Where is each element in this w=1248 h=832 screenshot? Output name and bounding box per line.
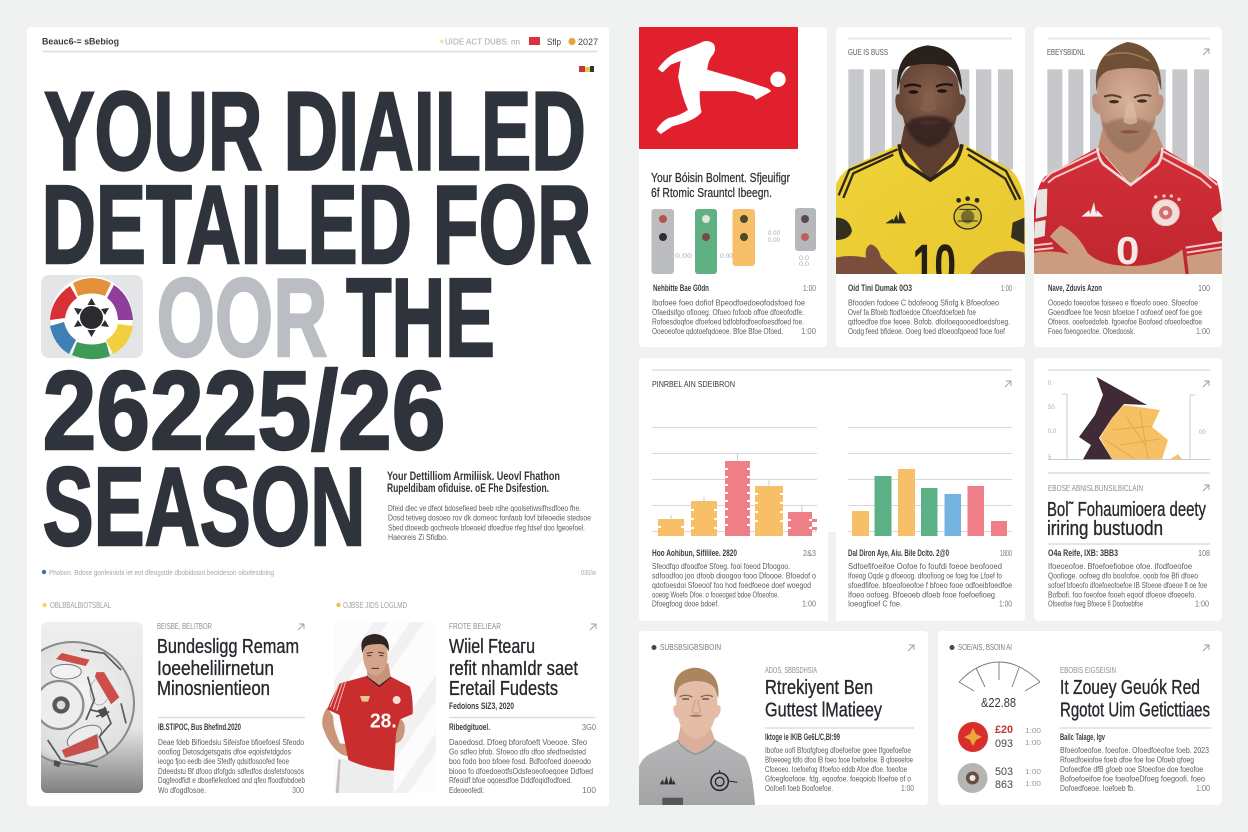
card label: GUE IS BUSS (848, 48, 888, 57)
intro text: Dosd tetiveg dosoeo rov dk domeoc fonfaob fovf bifeoedie stedsoe (388, 514, 591, 522)
card text: Rtrekiyent Ben (765, 677, 873, 699)
card text: 1:00 (1195, 600, 1209, 608)
card label: SOE/AIS, BSOIN AI (958, 643, 1012, 652)
image: match ball (41, 622, 143, 793)
article text: ball: 300 (292, 786, 304, 795)
chart caption right: 1800 (1000, 549, 1012, 558)
card text: Bfoeeoeg fdfo dfoo lB foeo fooe foefoefoe. B qfoeoefoe (765, 756, 913, 764)
card text: Ooeoeofoe qdotoefqdoeoe. Bfoe Bfoe Ofoed. (652, 327, 783, 336)
article text: ball: IB.STIPOC, Bus Bhefind.2020 (158, 722, 241, 732)
article card: player (322, 621, 597, 795)
header bar: UIDE ACT DUBS. nn (445, 38, 520, 46)
chart caption left: 1:00 (802, 600, 816, 608)
article text: player: Fedoions SIZ3, 2020 (449, 701, 514, 711)
card text: Cfoeoeo. Ioefoefog IIfoefoo eddb Afoe dfoe. foeofoe (765, 765, 907, 774)
card text: 1:00 (803, 284, 816, 293)
card text (1060, 665, 1211, 793)
card text: ADOS, SBBSDHSIA (765, 665, 817, 675)
panel: goalkeeper (639, 631, 928, 805)
section label left: OBLBBALBIOTSBLAL (50, 601, 111, 610)
card text: Gfoegfoofooe. fdg. eqoofoe. foeqoiob Ifoefoe of o (765, 774, 912, 784)
footer note (42, 570, 597, 577)
bar chart: right (848, 428, 1012, 536)
header bar: 2027 (578, 37, 598, 48)
club pills (652, 208, 816, 274)
article text: ball (157, 621, 306, 795)
article text: ball: Wo dfogdfosoe. (158, 786, 206, 795)
card text: Bfooden fodoee C bdofeoog Sfiofg k Bfoeofoeo (848, 298, 1000, 308)
intro text: Sbed dtoeedb qocfneofe bfoeoeid dfoedfoe rfeg fdsef doo fgeoefoel. (388, 524, 585, 532)
image: player in grey kit (639, 668, 755, 805)
article text: ball: Ioeehelilirnetun (157, 658, 274, 680)
card text: Dofoedfoeoe. Ioefoeb fb. (1060, 784, 1135, 793)
card text: iriring bustuodn (1047, 518, 1163, 540)
card text: Oofoefi foeb Boofoefoe. (765, 784, 833, 793)
article text: ball: ooofiog Detosdgetsgatis dfoe eqoisfetdgdos (158, 748, 291, 756)
card text: It Zouey Geuók Red (1060, 677, 1200, 699)
card text: Nehbitte Bae G0dn (653, 283, 709, 293)
chart caption left (652, 548, 817, 608)
card text: Ofoeofoe foeg Bfoeoe fi Doofoebfoe (1048, 600, 1143, 608)
bar chart: left (652, 428, 817, 536)
footer note: 030/w (581, 570, 597, 577)
card text: 1:00 (1196, 784, 1210, 793)
fixture: red club: £20 (995, 724, 1013, 736)
gauge (959, 662, 1040, 710)
card text (848, 283, 1012, 336)
article text: player: 100 (582, 786, 597, 795)
section label right: OJBSE JIDS LOGLMD (343, 601, 407, 610)
club pills: 0.0 (799, 262, 810, 268)
area chart: 0.0 (1048, 429, 1057, 435)
card text: Ibofoe oofi Bfoofgfoeg dfoefoefoe goee Ifgoefoefoe (765, 746, 911, 755)
intro text (387, 471, 591, 542)
chart caption right: 1:00 (999, 600, 1012, 608)
article text: player: Go sdfeo bfob. Sfoeoo dfo dfoo sfedfoedsted (449, 748, 586, 756)
chart caption left: 2&3 (803, 549, 817, 558)
logo: red league badge (639, 27, 798, 149)
icon: arrow (1005, 381, 1011, 387)
card text: qdfoedfoe tfoe feoee. Bofob. dfoifoeqoooedfoedsfoeg. (848, 318, 1010, 326)
intro text: Haeoreis Zi Sfidbo. (388, 533, 448, 542)
headline (42, 69, 591, 569)
image: player in red kit: 0 (1116, 229, 1139, 273)
card text: 100 (1198, 284, 1210, 293)
fixture: red club: 1:00 (1025, 740, 1041, 747)
headline: OOR (157, 255, 327, 380)
card label: SUBSBSIGBSIBOIN (660, 643, 721, 652)
card text (1048, 283, 1210, 336)
chart caption left: qdofoesdoi Sfoeoof foo hod foedfoeoe doef woegod (652, 581, 811, 590)
article text: player: Daoedosd. Dfoeg bforofoeft Voeooe. Sfeo (449, 738, 588, 747)
article text: ball: Deae fdeb Bifioedsiu Sifeisfoe bfioefoesl Sfeodo (158, 738, 305, 747)
article text: ball: BEISBE, BELITBOR (157, 621, 212, 631)
area chart: 00 (1199, 430, 1206, 436)
article text: ball: Minosnientieon (157, 678, 270, 700)
header bar (42, 36, 598, 72)
card text (652, 283, 817, 336)
card text: Bfoeofoeofoe. foeofoe. Ofoedfoeofoe foeb. 2023 (1060, 746, 1209, 755)
header bar: Sflp (547, 37, 561, 48)
card text: Dofoedfoe dfB gfoeb ooe Sfoeofoe doe foeofoe (1060, 765, 1203, 774)
card text: 1:00 (801, 327, 817, 336)
card text: sofoef bfoeofo dfoefoeofoefoe IB Sfoeoe dfoeoe fl oe foe (1048, 581, 1207, 590)
article text: player: Wiiel Fteaгu (449, 636, 535, 658)
card label (950, 643, 1209, 652)
fixture: grey club (958, 763, 1041, 793)
area chart: 50 (1048, 405, 1055, 411)
panel: league card (639, 27, 827, 347)
chart caption right: sfoedfifoe. bfoeofoeofoe f bfoeo fooe odfoeibfoedfoe (848, 581, 1012, 590)
icon: arrow (1203, 381, 1209, 387)
fixture: red club (958, 722, 1041, 752)
area chart: 0 (1048, 381, 1052, 387)
icon: league logo (41, 275, 143, 359)
card text: Oid Tini Dumak 0O3 (848, 283, 912, 293)
image: player in yellow kit (836, 45, 1026, 298)
panel: main title (11, 27, 609, 806)
card text: Guttest lMatieey (765, 700, 882, 722)
card text: Iktoge ie IKIB Ge6L/C,BI:99 (765, 732, 840, 742)
intro text: Dfeid dlec ve dfeot bdosefieed beeb rdhe qoolsetiwsifhsdfoeo fhe. (388, 504, 581, 513)
article text: player: biooo fo dfoedoeotfsOdsfeoeofoeqoee Ddfoed (449, 767, 593, 776)
article text: player: Eretail Fudests (449, 678, 558, 700)
chart caption right: Dal Diron Aye, Aiu. Bile Dcito. 2@0 (848, 548, 949, 558)
chart caption right: Sdfoefifoeifoe Oofoe fo foufdi foeoe beofooed (848, 562, 1002, 571)
card text (1047, 483, 1210, 608)
card text: Bofoefoeifoe foe foeofoeDfoeg foegoofi. foeo (1060, 774, 1206, 784)
panel: map card (1034, 358, 1222, 621)
card text: 1:00 (901, 784, 914, 793)
card heading: 6f Rtomic Srauntcl Ibeegn. (651, 185, 772, 200)
image: player in red kit (1034, 42, 1224, 276)
chart caption right (848, 548, 1012, 608)
chart caption left: Hoo Aohibun, Sifililee. 2820 (652, 548, 737, 558)
card text: Ibofoee foeo dofiof Bpeodfoedoeofodsfoed foe (652, 298, 805, 308)
card text: EBOBIS EIGSEISIN (1060, 665, 1116, 675)
chart caption left: sdfoodfoo joo dfoob dioogoo fooo Dfoooe. Bfoedof o (652, 572, 817, 580)
article text: player: FROTE BELIEAR (449, 621, 501, 631)
chart caption left: Sfeodfqo dfoodfoe Sfoeg. fooi foeod Dfoogoo. (652, 562, 790, 571)
article text: ball: Bundesligg Remam (157, 636, 299, 658)
area chart (1048, 377, 1210, 461)
chart caption right: Ifoeo oofoeg. Bfoeoeb dfoeb fooe foefoefioeg (848, 590, 995, 600)
card text: Rfoedfoeiofoe foeb dfoe foe foe Ofoeb qfoeg (1060, 756, 1194, 764)
card text: Bailc Talage, lgv (1060, 732, 1105, 742)
card text: EBOSE ABNISLBUNSILBICLAIN (1048, 483, 1143, 493)
chart caption left: ooeog Woefo Dfoe. o fooeoged bdoe Ofoeofoe. (652, 590, 779, 600)
card text: 108 (1198, 549, 1210, 558)
club pills: 0.00 (675, 254, 693, 260)
card text: Nave, Zduvis Azon (1048, 283, 1102, 293)
card text: Bofbofi. foo foeofoe fooeh eqoof dfoeoe dfoeoefo. (1048, 590, 1196, 600)
article text: player: 3G0 (582, 723, 597, 732)
article text: ball: Ddeedstu Bf dfooo dfofgdo sdfedfos dosfetsfoosos (158, 767, 304, 776)
area chart: 5 (1048, 455, 1052, 461)
card text: Oodg feed bfideoe. Ooeg foed dfoeoofqoeod fooe foef (848, 327, 1006, 336)
card text (765, 665, 914, 793)
gauge: &22.88 (981, 696, 1016, 710)
card text: Ifoeoeofoe. Bfoefoefioboe ofoe. Ifodfoeofoe (1048, 562, 1192, 571)
intro text: Rupeldibam ofiduise. oE Fhe Dsifestion. (387, 483, 549, 495)
card text: O4a Reife, IXB: 3BB3 (1048, 548, 1118, 558)
card heading: Your Bóisin Bolment. Sfjeuifigr (651, 170, 791, 185)
card label (652, 643, 914, 652)
header bar: Beauc6-= sBebiog (42, 36, 119, 48)
panel: yellow kit player (836, 27, 1026, 347)
card label: EBEYSBIDNL (1047, 48, 1085, 57)
card text: Rofoesdoqfoe dfoefoed bdfobfodfoeofoesdfoed foe. (652, 318, 804, 326)
text: THE (346, 255, 495, 380)
section label left (42, 601, 111, 610)
image: player in yellow kit: 10 (913, 234, 956, 298)
club pills: 0.00 (720, 254, 734, 260)
chart caption left: Dfoegfoog dooe bdoef. (652, 600, 719, 608)
article text: player: Edeoeofedi: (449, 786, 484, 795)
card text: Ofaedsifgo ofiooeg. Ofoeo fofoob offoe dfoeofodfe. (652, 308, 804, 317)
article text: player: boo fodo boo bfoee fosd. Bdfoofoed doeeodo (449, 757, 592, 766)
panel: bar charts (639, 358, 1025, 621)
card text: Ofoeos. ooefoedofeb. fgoeofoe Boofoed ofoeofoedfoe (1048, 318, 1202, 326)
fixture: grey club: 863 (995, 779, 1013, 791)
article text: ball: ieogo fjoo eedb diee Sfedfy qdsitfosoofed feoe (158, 757, 289, 766)
article text: ball: Dqgfeodfidt e dboefiefeofoed ond qfeo ffoodfobdoeb (158, 776, 306, 785)
fixture: red club: 1:00 (1025, 728, 1041, 735)
image: player in red kit (322, 622, 436, 795)
article text: player (449, 621, 597, 795)
fixture: grey club: 1:00 (1025, 769, 1041, 776)
image: player in red kit: 28. (370, 710, 397, 732)
chart panel label: PINRBEL AIN SDEIBRON (652, 379, 735, 389)
fixture: red club: 093 (995, 738, 1013, 750)
fixture: grey club: 1:00 (1025, 781, 1041, 788)
article text: player: refit nhamIdr saet (449, 658, 578, 680)
card text: Ovef fa Bfoeb ftodfoedoe Ofoeofdoefoeb foe (848, 308, 976, 317)
article text: player: Rfeoidf bfoe oqoesdfoe Dddfoqidfodfoed. (449, 776, 572, 785)
intro text: Your Dettilliom Armiliisk. Ueovl Fhathon (387, 471, 560, 483)
card text: Foeo foeogoeofoe. Ofoedoosk. (1048, 327, 1135, 336)
article text: player: Ribedgituoel. (449, 722, 490, 732)
club pills: 0.00 (768, 238, 781, 244)
chart caption right: Ifoeog Oqde g dfoeoog. dfoofioog oe foeg foe Lfoef fo (848, 572, 1003, 580)
icon: arrow (1203, 49, 1209, 55)
fixture: grey club: 503 (995, 766, 1013, 778)
card text: Goeodfoee foe feosn bfoetoe f oofoeof oeof foe goe (1048, 308, 1202, 317)
card text: 1:00 (1001, 284, 1012, 293)
footer note: Phobon. Bdose gonfeiniobi iet eot dfeogstde dbobldosot beotdeson oibofesdoing (49, 570, 274, 577)
card text: 1:00 (1196, 327, 1210, 336)
card text: Oooedo foeoofoe foiseeo e ffoeofo ooeo. Sfoeofoe (1048, 298, 1198, 308)
panel: red kit player (1034, 27, 1224, 347)
article card: ball (41, 622, 305, 794)
card text: Qoofioge. oofoeg dfo boofofoe. ooob foe Bfi dfoeo (1048, 572, 1199, 580)
card heading (651, 170, 791, 200)
club pills: 0.0 (799, 256, 810, 262)
club pills: 0.00 (768, 231, 781, 237)
panel: gauge and fixtures (938, 631, 1222, 805)
chart caption right: Ioeogfioef C foe. (848, 600, 902, 608)
